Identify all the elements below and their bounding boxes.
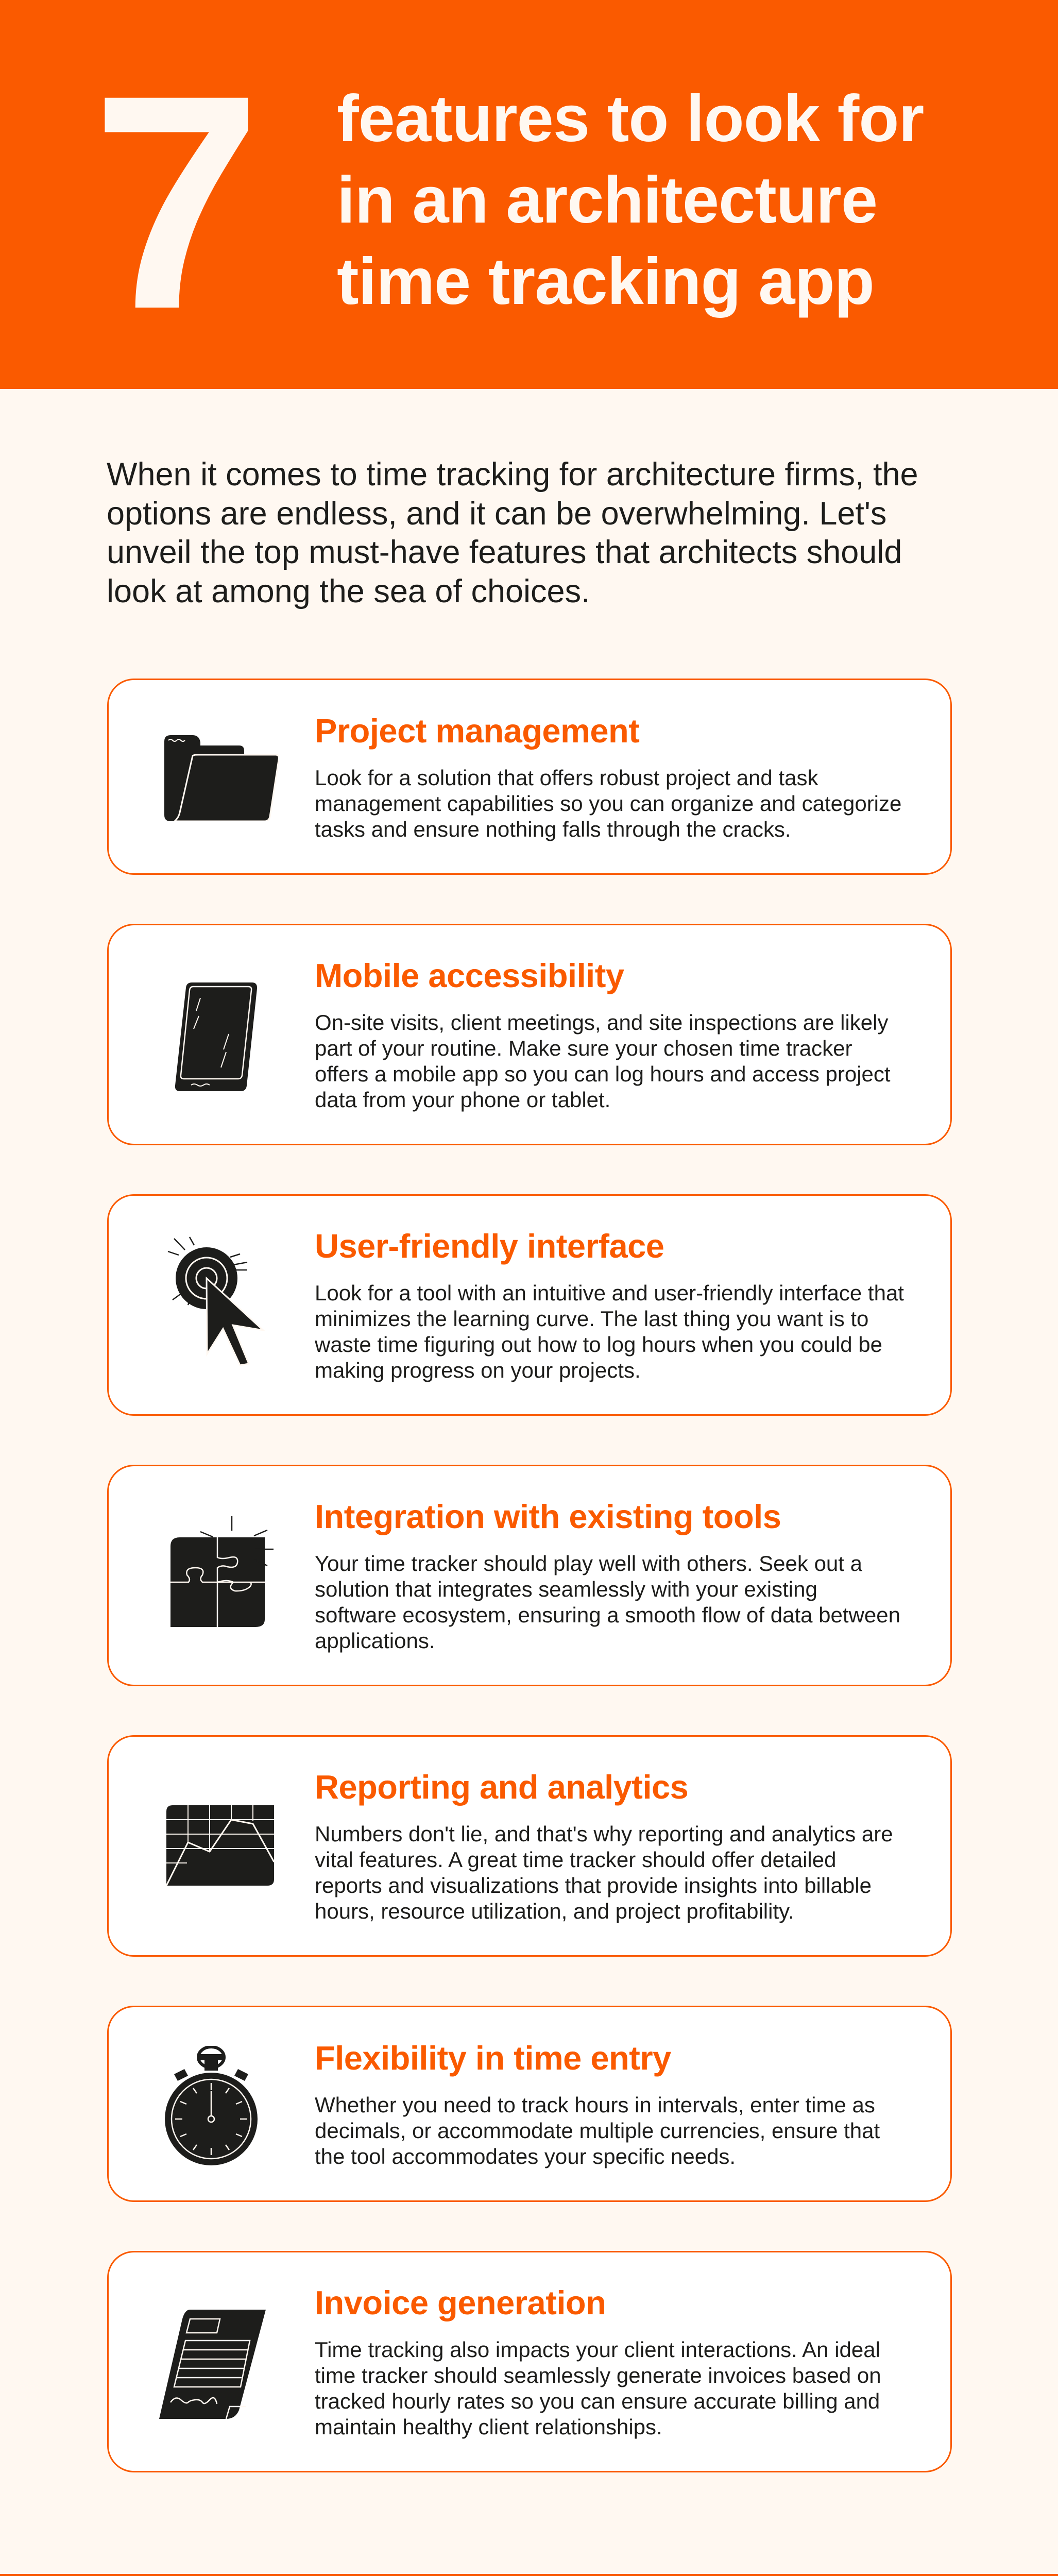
- icon: chart: [166, 1805, 275, 1886]
- icon: invoice: [159, 2310, 266, 2419]
- panel: mobile accessibility: Mobile accessibility: [315, 957, 624, 994]
- panel: user-friendly interface: minimizes the learning curve. The last thing you want is to: [315, 1307, 868, 1331]
- intro text: look at among the sea of choices.: [107, 573, 590, 609]
- panel: project management: tasks and ensure nothing falls through the cracks.: [315, 817, 791, 841]
- icon: phone: [175, 982, 258, 1091]
- panel: integration: [107, 1465, 952, 1686]
- intro text: When it comes to time tracking for architecture firms, the: [107, 456, 918, 493]
- header band: [0, 0, 1058, 389]
- panel: user-friendly interface: waste time figuring out how to log hours when you could be: [315, 1332, 882, 1357]
- intro text: [107, 456, 918, 609]
- big number 7: 7: [92, 32, 261, 372]
- panel: mobile accessibility: offers a mobile app so you can log hours and access project: [315, 1062, 891, 1086]
- panel: flexibility: Flexibility in time entry: [315, 2039, 671, 2076]
- panel: user-friendly interface: making progress on your projects.: [315, 1358, 641, 1382]
- panel: flexibility: decimals, or accommodate multiple currencies, ensure that: [315, 2119, 880, 2142]
- title: in an architecture: [337, 163, 877, 237]
- panel: user-friendly interface: [107, 1194, 952, 1416]
- panel: flexibility: [107, 2006, 952, 2202]
- title: features to look for: [337, 82, 924, 156]
- panel: user-friendly interface: User-friendly interface: [315, 1227, 664, 1265]
- icon: puzzle: [170, 1516, 274, 1627]
- panel: project management: [107, 679, 952, 875]
- panel: reporting: [107, 1735, 952, 1957]
- panel: integration: solution that integrates seamlessly with your existing: [315, 1577, 817, 1601]
- panel: mobile accessibility: data from your phone or tablet.: [315, 1088, 610, 1112]
- panel: reporting: reports and visualizations that provide insights into billable: [315, 1873, 872, 1897]
- icon: target cursor: [168, 1236, 265, 1366]
- panel: user-friendly interface: Look for a tool with an intuitive and user-friendly interface that: [315, 1281, 904, 1305]
- panel: reporting: hours, resource utilization, and project profitability.: [315, 1899, 794, 1923]
- panel: mobile accessibility: [107, 924, 952, 1145]
- panel: reporting: Numbers don't lie, and that's why reporting and analytics are: [315, 1822, 893, 1846]
- icon: folder: [164, 735, 279, 821]
- title: [337, 82, 924, 318]
- panel: invoice: Invoice generation: [315, 2284, 606, 2321]
- panel: mobile accessibility: On-site visits, client meetings, and site inspections are likely: [315, 1010, 888, 1035]
- icon: stopwatch: [165, 2046, 258, 2165]
- panel: mobile accessibility: part of your routine. Make sure your chosen time tracker: [315, 1036, 852, 1060]
- panel: flexibility: Whether you need to track hours in intervals, enter time as: [315, 2093, 875, 2116]
- panel: invoice: time tracker should seamlessly generate invoices based on: [315, 2363, 881, 2387]
- panel: reporting: vital features. A great time tracker should offer detailed: [315, 1848, 836, 1872]
- panel: integration: Integration with existing tools: [315, 1498, 781, 1535]
- panel: invoice: [107, 2251, 952, 2472]
- panel: invoice: Time tracking also impacts your client interactions. An ideal: [315, 2337, 880, 2362]
- panel: integration: applications.: [315, 1629, 435, 1653]
- intro text: options are endless, and it can be overwhelming. Let's: [107, 496, 886, 532]
- footer band: [0, 2574, 1058, 2576]
- intro text: unveil the top must-have features that architects should: [107, 534, 902, 570]
- panel: project management: Look for a solution that offers robust project and task: [315, 766, 818, 789]
- panel: flexibility: the tool accommodates your specific needs.: [315, 2144, 736, 2168]
- panel: integration: Your time tracker should play well with others. Seek out a: [315, 1551, 862, 1575]
- panel: invoice: tracked hourly rates so you can ensure accurate billing and: [315, 2389, 880, 2413]
- panel: project management: management capabilities so you can organize and categorize: [315, 791, 901, 815]
- title: time tracking app: [337, 245, 874, 318]
- panel: reporting: Reporting and analytics: [315, 1768, 688, 1806]
- panel: integration: software ecosystem, ensuring a smooth flow of data between: [315, 1603, 900, 1627]
- panel: invoice: maintain healthy client relationships.: [315, 2415, 662, 2439]
- panel: project management: Project management: [315, 712, 639, 749]
